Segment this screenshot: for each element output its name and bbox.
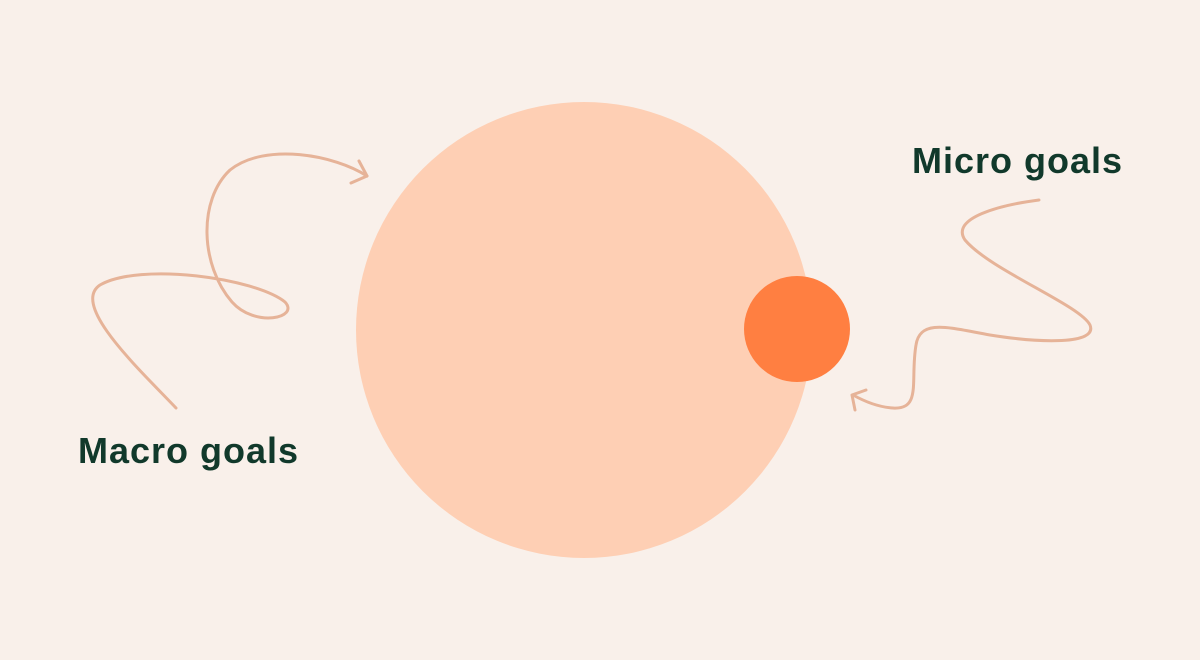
big circle: macro xyxy=(356,102,812,558)
arrow: macro goals loop xyxy=(93,154,367,408)
small circle: micro xyxy=(744,276,850,382)
label: Macro goals: Macro goals xyxy=(78,430,298,471)
arrow: micro goals squiggle xyxy=(852,200,1091,410)
label: Micro goals: Micro goals xyxy=(912,140,1122,181)
